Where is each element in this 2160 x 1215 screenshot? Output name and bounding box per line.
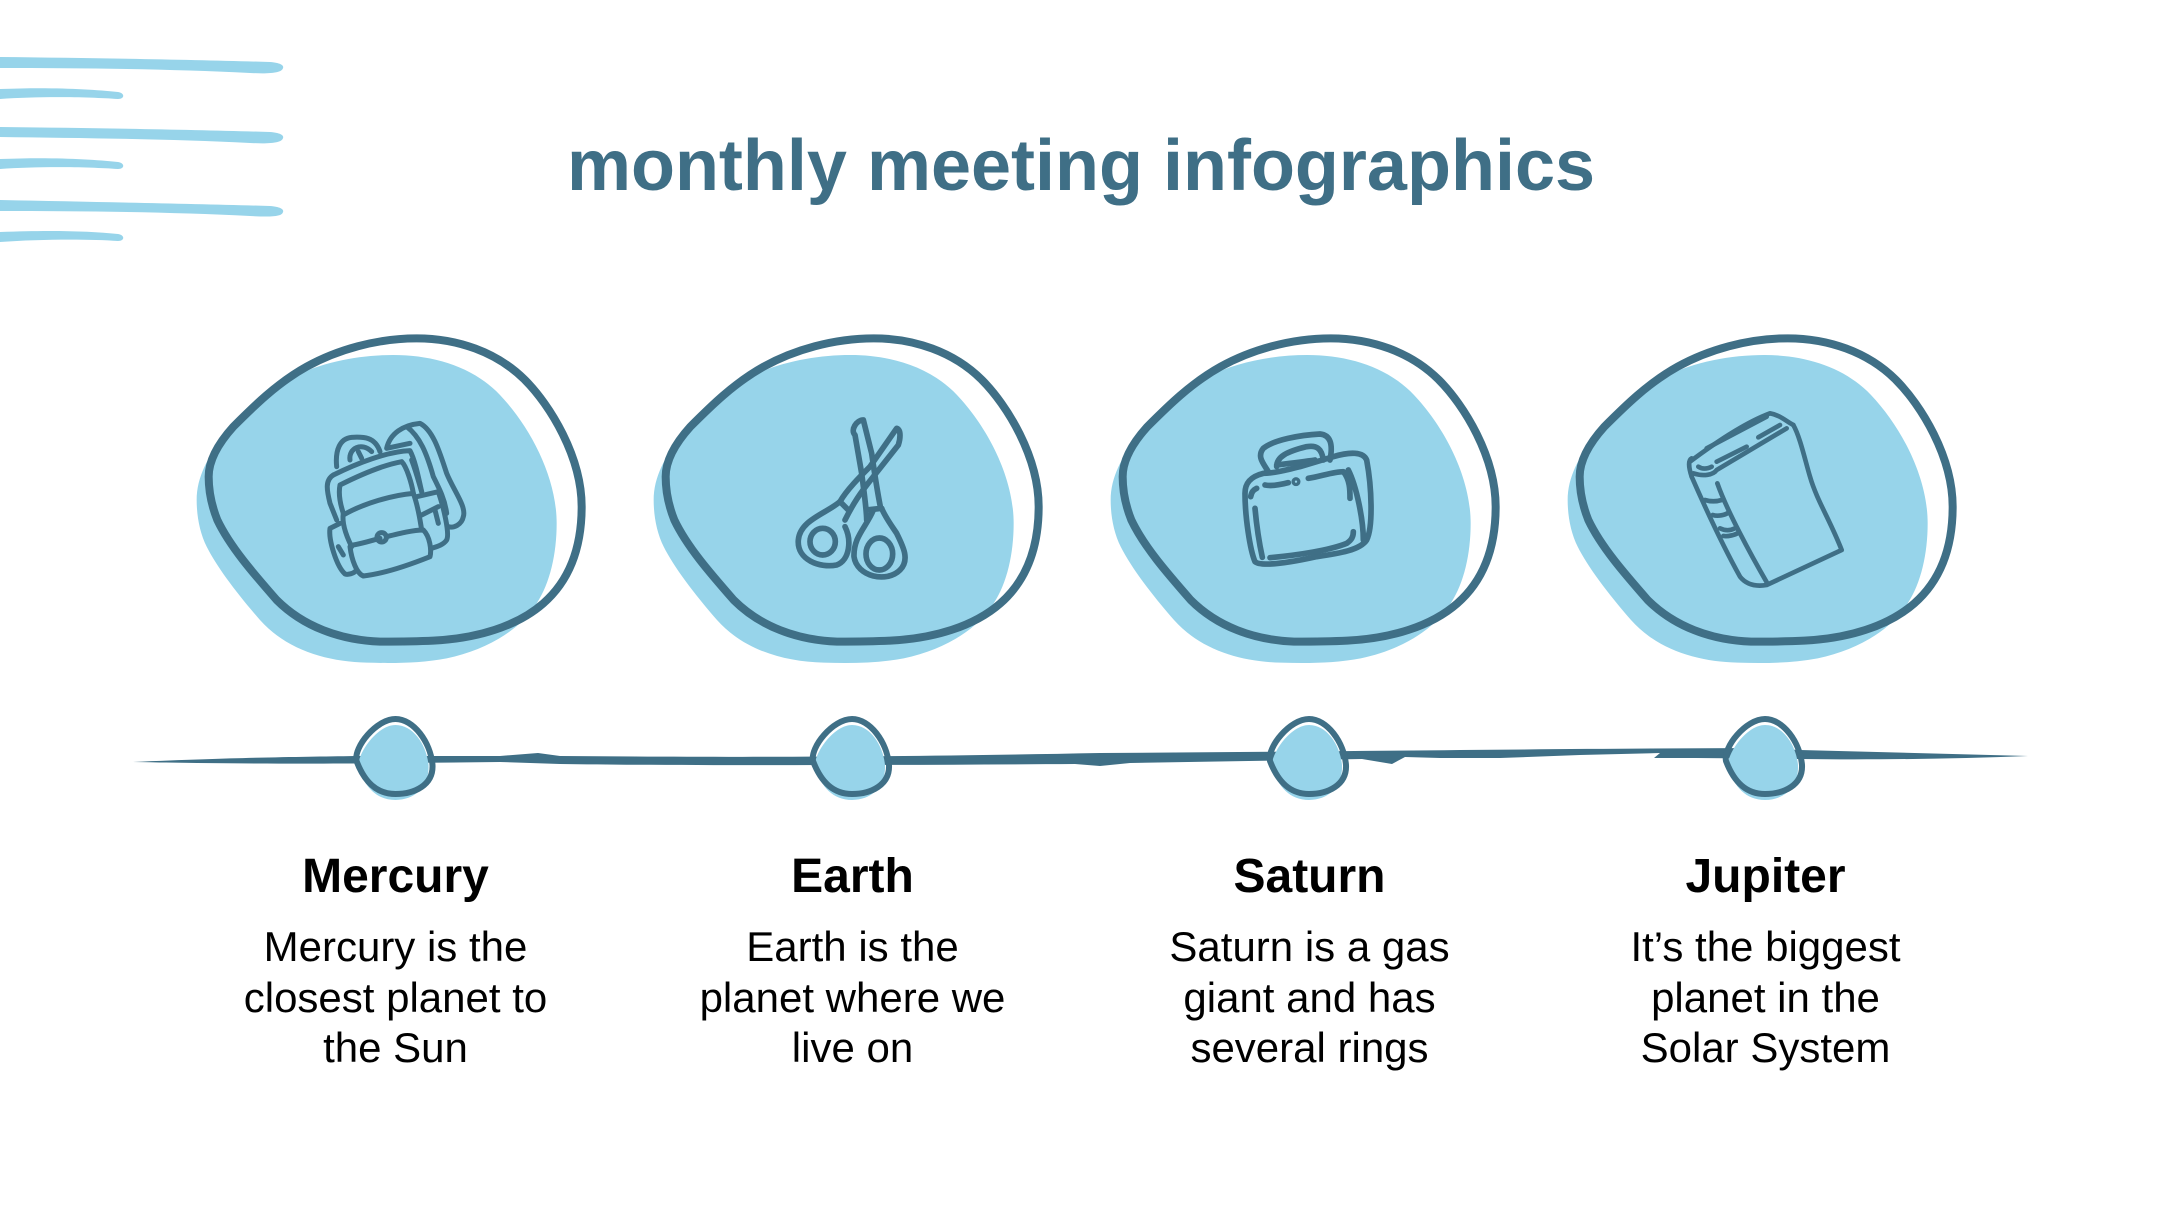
label: Jupiter: [1630, 850, 1901, 1071]
icon: book: [1689, 413, 1842, 586]
node: Saturn: [1270, 719, 1346, 800]
label: Mercury: [244, 850, 547, 1071]
label: Earth: [700, 850, 1005, 1071]
description: Jupiter: It’s the biggest: [1630, 923, 1901, 970]
node: Earth: [813, 719, 889, 800]
heading: Earth: Earth: [791, 850, 914, 903]
description: Jupiter: planet in the: [1651, 974, 1880, 1021]
heading: Mercury: Mercury: [302, 850, 489, 903]
description: Saturn: Saturn is a gas: [1169, 923, 1450, 970]
node: Jupiter: [1726, 719, 1802, 800]
blob outline: [1580, 338, 1953, 642]
blob fill: [654, 355, 1014, 663]
card: Earth circle: [654, 338, 1039, 663]
node: Mercury: [356, 719, 433, 800]
label: Saturn: [1169, 850, 1450, 1071]
blob fill: [197, 355, 557, 663]
description: Mercury: closest planet to: [244, 974, 547, 1021]
description: Mercury: the Sun: [323, 1024, 468, 1071]
blob outline: [209, 338, 582, 642]
decoration: brush stripes: [0, 57, 283, 242]
description: Saturn: several rings: [1190, 1024, 1429, 1071]
description: Earth: planet where we: [700, 974, 1005, 1021]
description: Earth: Earth is the: [746, 923, 959, 970]
blob outline: [666, 338, 1039, 642]
blob fill: [1111, 355, 1471, 663]
description: Saturn: giant and has: [1183, 974, 1436, 1021]
card: Saturn circle: [1111, 338, 1496, 663]
blob fill: [1568, 355, 1928, 663]
icon: scissors: [798, 420, 905, 577]
card: Mercury circle: [197, 338, 582, 663]
heading: Saturn: Saturn: [1233, 850, 1386, 903]
description: Mercury: Mercury is the: [264, 923, 527, 970]
heading: Jupiter: Jupiter: [1685, 850, 1846, 903]
description: Earth: live on: [792, 1024, 913, 1071]
timeline brush line: [133, 748, 2028, 766]
title: monthly meeting infographics: [567, 126, 1595, 206]
card: Jupiter circle: [1568, 338, 1953, 663]
icon: backpack: [327, 423, 464, 576]
timeline: [133, 719, 2028, 800]
blob outline: [1123, 338, 1496, 642]
icon: briefcase: [1245, 434, 1371, 564]
description: Jupiter: Solar System: [1641, 1024, 1890, 1071]
